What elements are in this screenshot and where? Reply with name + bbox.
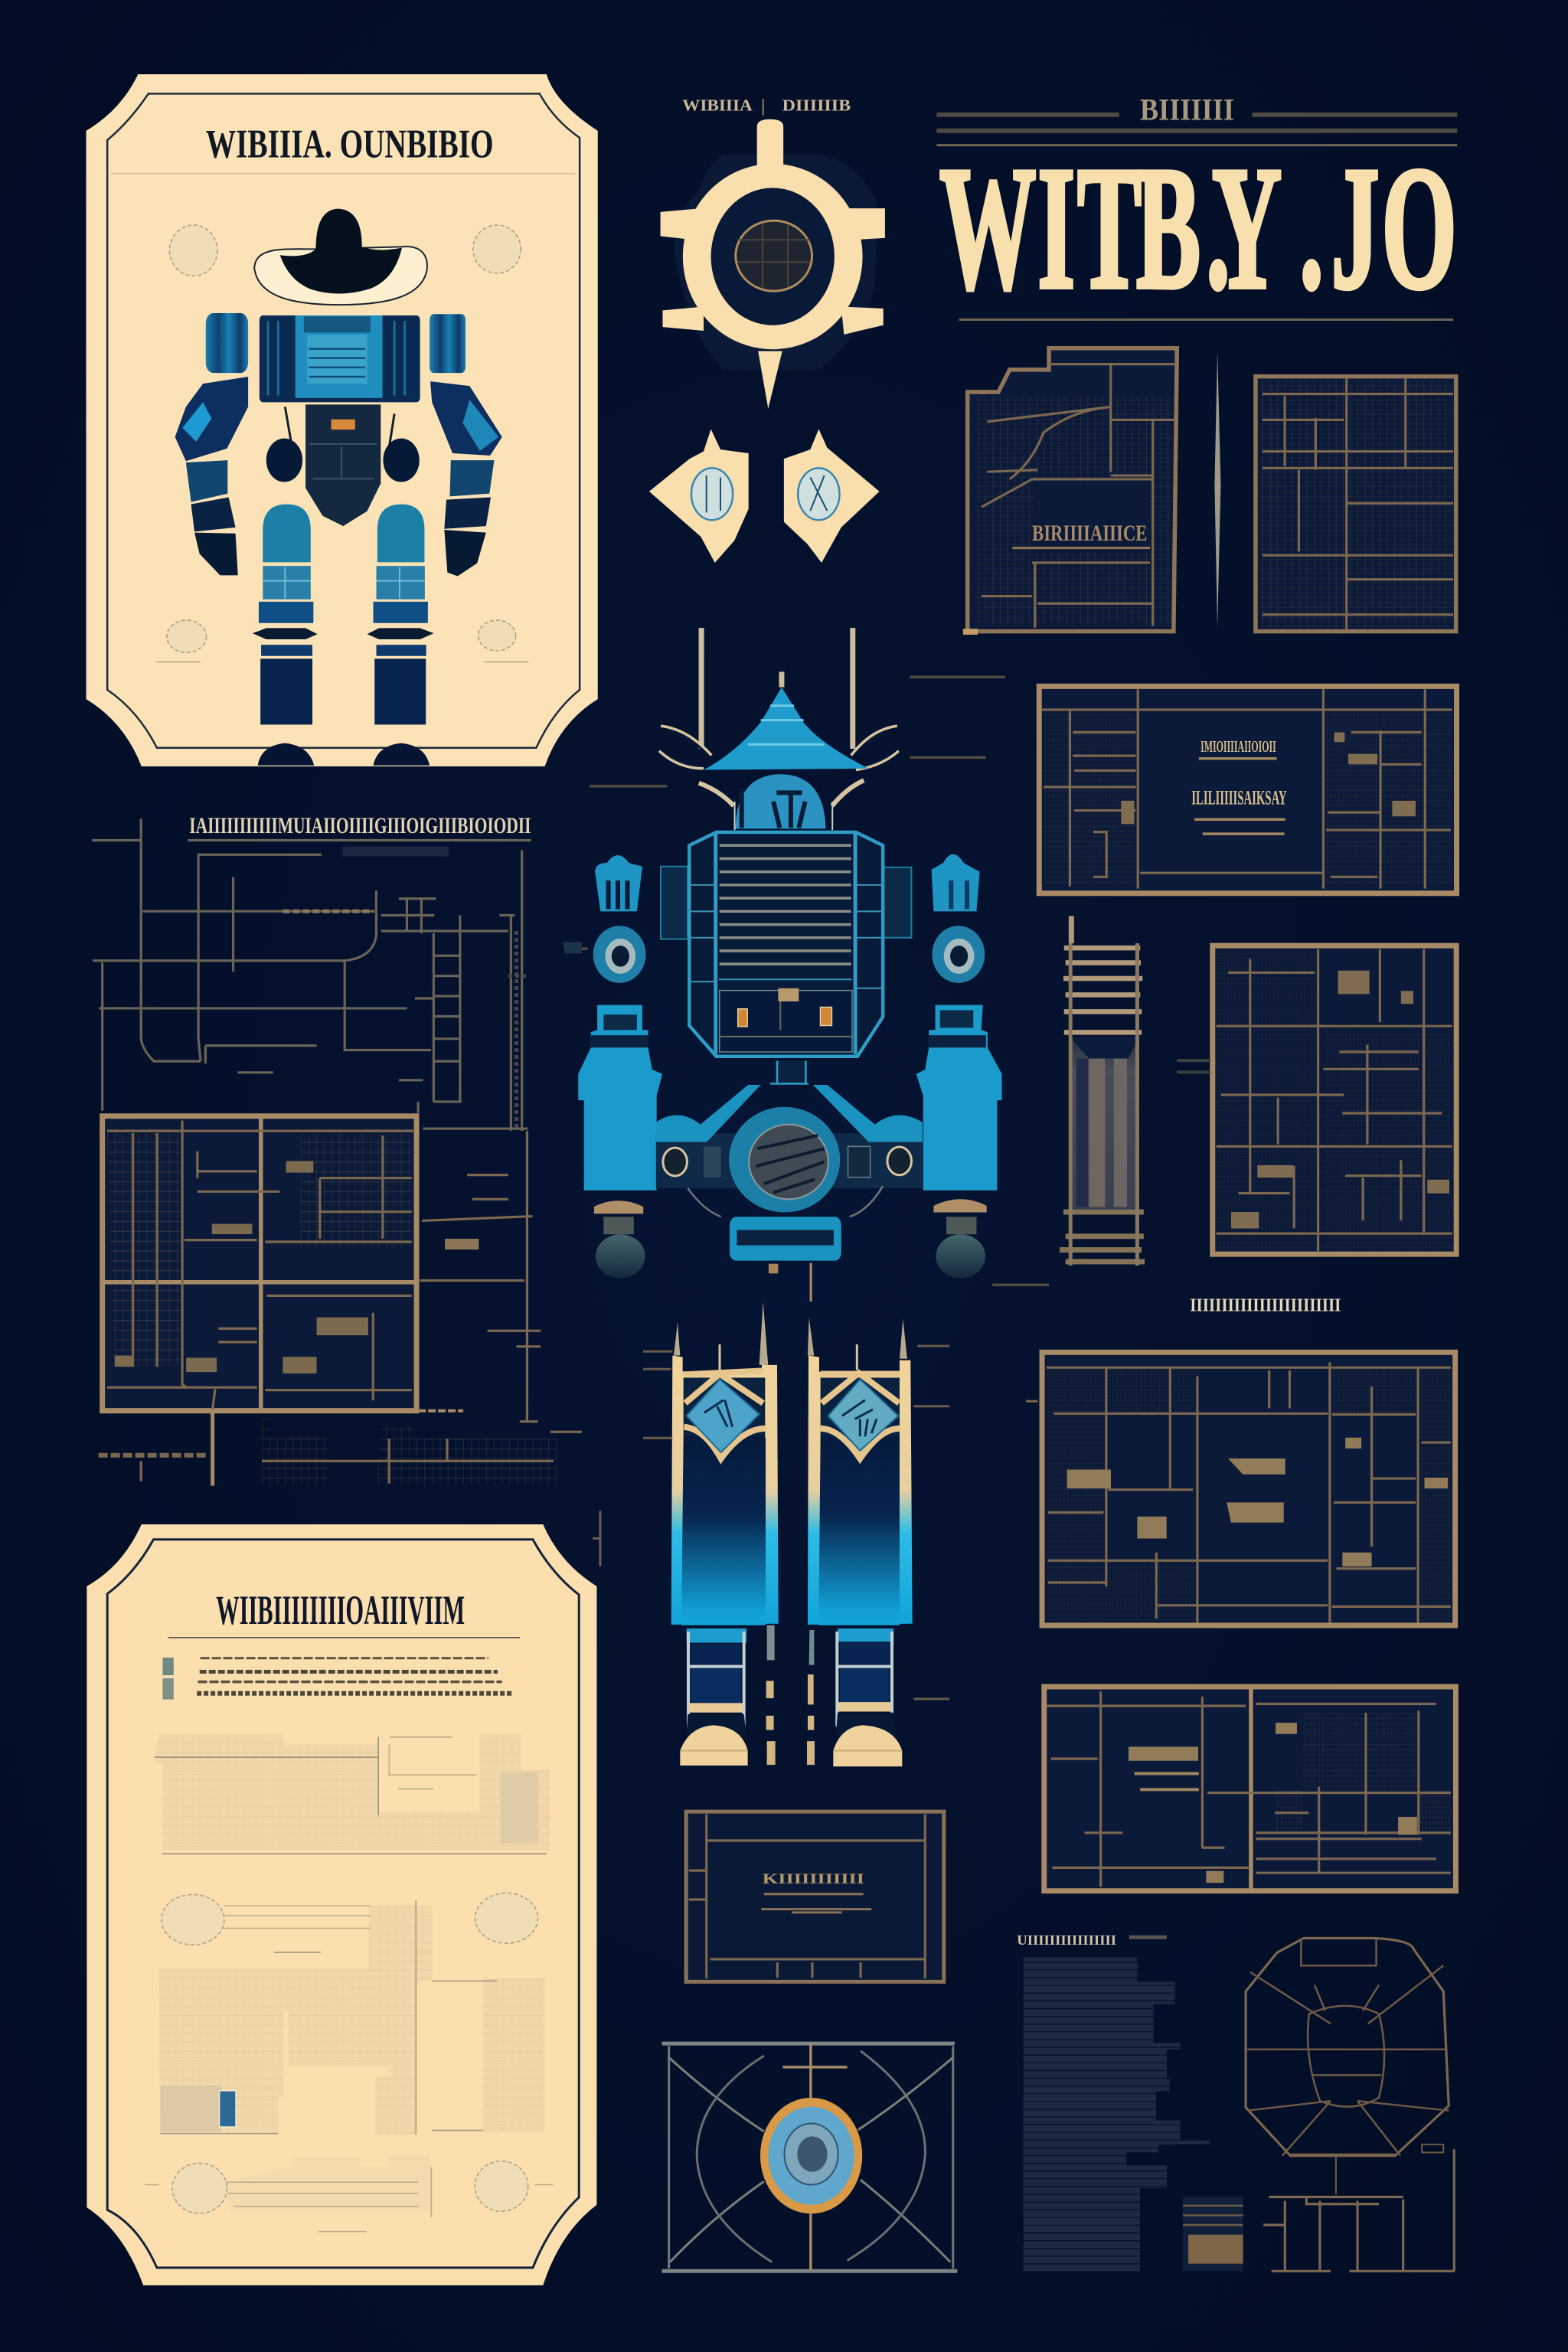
dim leaders — [643, 1346, 949, 1699]
schematic heading: IAIIIIIIIIIIIMUIAIIOIIIIGIIIOIGIIIBIOIODII — [189, 813, 531, 838]
text bar stack — [1017, 1933, 1210, 2272]
header block: emblem and title — [649, 93, 1457, 635]
arms — [175, 377, 502, 577]
upper side parts — [593, 854, 985, 983]
arm blocks — [578, 1005, 1002, 1191]
head — [735, 774, 832, 830]
gauge emblem — [662, 2043, 957, 2271]
title: . — [1206, 132, 1230, 326]
title rules: BIIIIIII — [1140, 93, 1234, 127]
spindle divider — [1214, 351, 1220, 628]
bottom centre and right — [662, 1811, 1454, 2272]
right framed plans — [1039, 686, 1457, 1266]
panel: top-left robot card — [86, 74, 598, 766]
parchment title: WIIBIIIIIIIIOAIIIVIIM — [216, 1587, 465, 1633]
lower right framed plans — [1026, 1295, 1455, 1891]
octagon schematic — [1246, 1939, 1449, 2194]
left leg — [253, 505, 318, 766]
hat — [254, 209, 427, 305]
diamond badge left — [649, 429, 749, 563]
left parchment card — [87, 1511, 600, 2285]
parchment ornaments — [162, 1893, 538, 2213]
lower right structure — [1183, 2149, 1454, 2272]
pipework lines — [92, 818, 531, 1131]
side vents — [661, 867, 911, 939]
small top caption: WIBIIIA — [682, 96, 753, 114]
parchment bottom strip — [145, 1906, 554, 2232]
central robot torso — [564, 628, 1049, 1302]
dim marker — [593, 1511, 600, 1566]
hanging feet — [594, 1199, 987, 1279]
small top caption — [682, 96, 851, 116]
caption panel — [686, 1811, 944, 1981]
torso screen — [260, 315, 420, 402]
wide plan panel: ILILIIIIISAIKSAY — [1191, 787, 1287, 809]
blue window — [220, 2091, 236, 2127]
plan panel left — [963, 348, 1177, 635]
footer plans — [99, 1413, 582, 1486]
small section heading: IIIIIIIIIIIIIIIIIIIIIIII — [1190, 1295, 1341, 1315]
title: J — [1331, 132, 1380, 326]
title: B — [1136, 132, 1200, 326]
wide plan panel: IMIOIIIIAIIOIOII — [1200, 738, 1276, 756]
title: . — [1299, 132, 1324, 326]
text bar stack: UIIIIIIIIIIIIIIII — [1017, 1933, 1116, 1948]
right boot — [807, 1628, 902, 1766]
antennas and horns — [659, 628, 899, 806]
square plan panel — [1177, 946, 1456, 1254]
conical hat — [704, 688, 868, 769]
parchment upper plan — [155, 1735, 550, 1854]
robot with hat — [175, 209, 502, 766]
main framed plan — [103, 1116, 416, 1411]
wide plan panel — [1039, 686, 1457, 893]
right shin — [808, 1318, 913, 1625]
ornaments — [156, 225, 528, 662]
card title: WIBIIIA. OUNBIBIO — [206, 122, 494, 167]
column pillar — [1060, 916, 1145, 1266]
plan panel left: BIRIIIIAIIICE — [1032, 521, 1147, 546]
title: Y — [1212, 132, 1282, 326]
plan panel right — [1256, 377, 1456, 632]
right leg — [367, 505, 433, 766]
title: T — [1077, 132, 1142, 326]
title rules — [936, 93, 1457, 319]
shoulders — [206, 313, 466, 373]
lower plan panel — [1044, 1687, 1455, 1891]
diamond badge right — [784, 429, 880, 563]
title: O — [1382, 132, 1457, 326]
caption panel: KIIIIIIIIIII — [763, 1870, 864, 1886]
robot legs — [643, 1302, 949, 1766]
parchment lower plan — [158, 1900, 545, 2135]
parchment data rows — [162, 1658, 512, 1700]
waist tray — [730, 1217, 841, 1302]
upper plan panel — [1026, 1352, 1455, 1625]
title — [939, 132, 1457, 326]
left schematic block — [92, 813, 582, 1486]
title: I — [1037, 132, 1075, 326]
right side leaders — [418, 942, 582, 1422]
gear emblem — [661, 119, 885, 409]
pelvis — [656, 1060, 923, 1217]
dim leader labels — [564, 677, 1049, 1285]
belly — [266, 404, 420, 526]
title: W — [939, 132, 1036, 326]
grille body — [689, 832, 883, 1057]
small top caption: DIIIIIIB — [782, 96, 851, 114]
left boot — [680, 1625, 776, 1766]
left shin — [671, 1302, 779, 1625]
